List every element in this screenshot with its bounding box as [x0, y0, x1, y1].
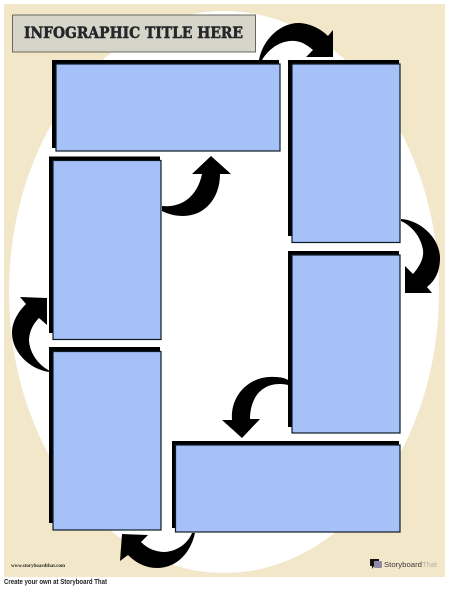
panel: top wide box: [52, 60, 280, 151]
panel: right lower box: [288, 251, 400, 433]
title banner: [12, 15, 256, 52]
footer caption: Create your own at Storyboard That: [4, 579, 108, 586]
title banner: INFOGRAPHIC TITLE HERE: [24, 23, 243, 42]
panel: left upper box: [49, 156, 161, 340]
website url: www.storyboardthat.com: [11, 564, 66, 569]
arrow: right lower box to bottom box: [222, 377, 288, 438]
logo: Storyboard That: [370, 559, 438, 569]
logo: Storyboard That: Storyboard: [384, 560, 422, 569]
logo: Storyboard That: That: [422, 560, 438, 569]
panel: right upper box: [288, 60, 400, 242]
arrow: top box to right upper box: [259, 23, 333, 60]
panel: left lower box: [49, 347, 161, 530]
arrow: left upper box to top box: [162, 156, 231, 216]
panel: bottom wide box: [172, 441, 400, 532]
arrow: bottom box to left lower box: [120, 533, 195, 568]
arrow: right upper box to right lower box: [401, 219, 440, 293]
arrow: left lower box to left upper box: [12, 297, 50, 372]
